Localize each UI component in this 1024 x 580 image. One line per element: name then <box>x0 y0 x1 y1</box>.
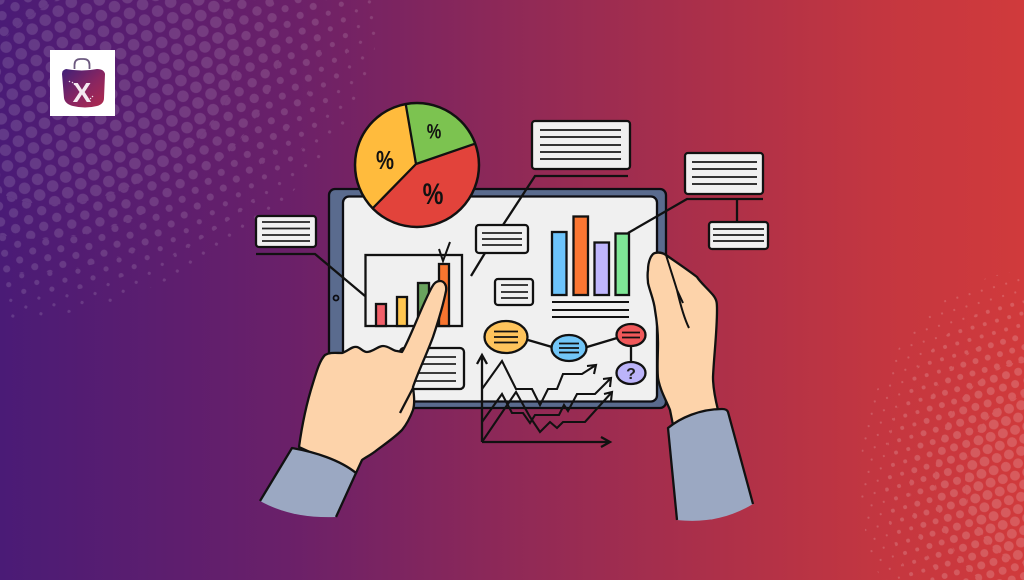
callout: top note <box>532 121 630 169</box>
pie chart with percent labels: % <box>427 120 442 143</box>
text box: lower note behind finger <box>400 348 464 389</box>
illustration: tablet with charts held by two hands <box>50 50 770 521</box>
pie chart with percent labels <box>354 102 480 228</box>
right sleeve <box>668 409 753 521</box>
logo: shopping bag with X: X <box>73 77 92 108</box>
callout: middle note with leader line <box>471 176 628 276</box>
left sleeve <box>260 448 356 517</box>
logo: shopping bag with X <box>50 50 115 116</box>
text box: small note <box>495 279 533 305</box>
right hand: holding tablet <box>648 253 718 425</box>
pie chart with percent labels: % <box>376 146 394 175</box>
bar chart: small framed chart <box>366 242 462 326</box>
tablet body <box>329 189 666 408</box>
line chart: three rising arrows on axes <box>477 355 612 447</box>
flow diagram: ovals and question mark: ? <box>626 366 636 383</box>
pie chart with percent labels: % <box>423 177 443 211</box>
flow diagram: ovals and question mark <box>484 321 646 384</box>
callout: left note with leader line <box>256 216 365 296</box>
callout: right notes with leader lines <box>628 153 768 249</box>
bar chart: large coloured bars <box>552 216 629 317</box>
left hand: pointing finger <box>299 281 446 473</box>
